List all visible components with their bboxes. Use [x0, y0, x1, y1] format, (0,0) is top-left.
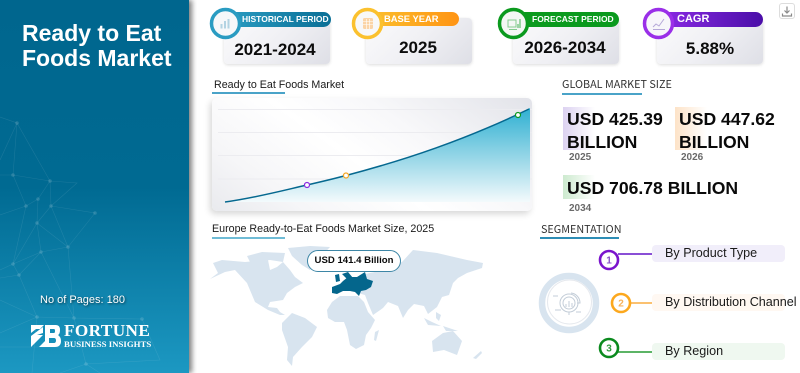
heading: market chart: Ready to Eat Foods Market	[214, 79, 344, 91]
number badge	[598, 338, 620, 358]
year: 2026	[681, 152, 703, 163]
sidebar panel	[0, 0, 189, 373]
world map	[210, 246, 483, 366]
value: USD 706.78 BILLION	[567, 178, 738, 198]
label: By Region	[665, 344, 723, 358]
number badge: 3	[606, 344, 612, 354]
value: 2021-2024	[234, 40, 316, 59]
value: BILLION	[679, 132, 749, 152]
segment 3	[598, 338, 785, 360]
chart panel: market growth area chart	[212, 98, 532, 211]
header ribbon: FORECAST PERIOD	[532, 14, 614, 24]
page count: No of Pages: 180	[40, 294, 125, 306]
connector	[630, 302, 652, 304]
value: USD 425.39	[567, 109, 663, 129]
area under curve	[225, 108, 530, 202]
label pill	[652, 343, 785, 360]
year: 2025	[569, 152, 591, 163]
decorative network pattern	[0, 116, 160, 373]
market size 2026	[675, 107, 775, 163]
number badge: 2	[618, 298, 624, 310]
header ribbon: HISTORICAL PERIOD	[242, 14, 329, 24]
card body	[366, 18, 472, 64]
connector	[618, 253, 652, 255]
stat card: CAGR	[642, 8, 764, 66]
title: Foods Market	[22, 45, 172, 71]
segment 1	[598, 245, 785, 270]
stat card: historical period	[210, 8, 331, 66]
label: By Distribution Channel	[665, 295, 797, 309]
logo wordmark: FORTUNE	[64, 321, 150, 340]
year: 2034	[569, 203, 591, 214]
marker 2025	[304, 182, 310, 188]
value: 2025	[399, 38, 437, 57]
marker 2026	[344, 173, 348, 178]
title	[22, 20, 172, 71]
heading: segmentation: SEGMENTATION	[541, 221, 622, 237]
header ribbon	[513, 12, 619, 27]
icon: calendar badge	[352, 8, 383, 40]
heading: global market size: GLOBAL MARKET SIZE	[562, 76, 672, 92]
segmentation hub icon	[538, 272, 600, 334]
stat card: base year	[352, 8, 473, 66]
icon: download button	[779, 3, 795, 19]
card body	[513, 18, 619, 64]
label pill	[652, 245, 785, 262]
map callout: USD 141.4 Billion	[315, 255, 393, 266]
colour swatch	[675, 107, 707, 150]
number badge: 1	[606, 256, 612, 266]
header ribbon: CAGR	[677, 13, 709, 25]
value	[567, 109, 663, 152]
logo	[31, 321, 151, 349]
connector	[618, 351, 652, 353]
value: 2026-2034	[524, 38, 606, 57]
label: By Product Type	[665, 246, 757, 260]
market size 2025	[563, 107, 663, 163]
header ribbon	[658, 12, 763, 27]
europe highlight	[332, 272, 373, 296]
trend line	[225, 109, 529, 202]
header ribbon	[367, 12, 459, 26]
card body	[657, 18, 763, 64]
icon: bar chart badge	[210, 8, 241, 40]
icon: forecast badge	[498, 8, 529, 40]
number badge	[598, 250, 620, 270]
logo mark	[31, 325, 61, 347]
header ribbon: BASE YEAR	[384, 13, 439, 24]
header ribbon	[225, 12, 331, 27]
colour swatch	[563, 107, 595, 150]
stat card: forecast period	[498, 8, 620, 66]
heading: europe map: Europe Ready-to-Eat Foods Market Size, 2025	[212, 223, 434, 235]
number badge	[610, 292, 632, 314]
map callout	[307, 250, 401, 272]
label pill	[652, 294, 785, 311]
value: 5.88%	[686, 39, 734, 58]
value: BILLION	[567, 132, 637, 152]
title: Ready to Eat	[22, 20, 161, 46]
market size 2034	[563, 175, 738, 214]
value	[679, 109, 775, 152]
card body	[224, 18, 330, 64]
value: USD 447.62	[679, 109, 775, 129]
marker 2034	[516, 112, 520, 118]
segment 2	[610, 292, 797, 314]
colour swatch	[563, 175, 595, 199]
logo tagline: BUSINESS INSIGHTS	[64, 339, 151, 349]
icon: growth badge	[642, 8, 674, 40]
